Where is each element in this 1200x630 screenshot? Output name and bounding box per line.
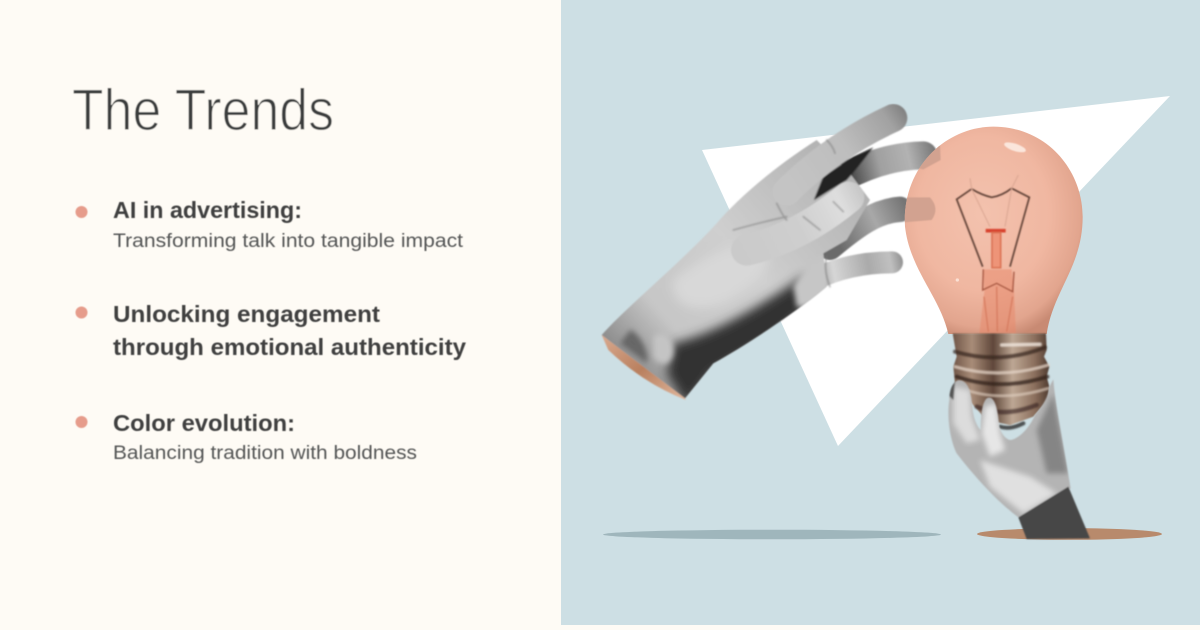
highlight — [1003, 140, 1027, 154]
bullet — [76, 306, 88, 318]
description: Balancing tradition with boldness — [113, 443, 417, 464]
knuckle shading — [733, 140, 843, 287]
heading second line: through emotional authenticity — [113, 334, 466, 360]
screw base — [953, 333, 1049, 428]
title: The Trends — [72, 78, 334, 143]
heading: Unlocking engagement — [113, 301, 380, 327]
fingertips seen through glass — [903, 143, 941, 222]
white triangle — [702, 96, 1170, 446]
panel: illustration background — [561, 0, 1200, 625]
filament support wire — [957, 175, 1029, 334]
list item: Unlocking engagement — [76, 301, 466, 360]
heading: Color evolution: — [113, 410, 295, 436]
bullet — [76, 416, 88, 428]
description: Transforming talk into tangible impact — [113, 231, 464, 252]
list item: AI in advertising — [76, 197, 464, 252]
bulb glass — [905, 127, 1083, 334]
shadow ellipse under hand — [603, 530, 941, 539]
hole ellipse under lower hand — [977, 528, 1162, 540]
icon: holding hand — [947, 379, 1090, 539]
bullet — [76, 206, 88, 218]
dark gap between fingers — [814, 147, 873, 200]
heading: AI in advertising: — [113, 197, 302, 223]
icon: reaching hand — [602, 118, 923, 407]
icon: light bulb — [903, 127, 1083, 428]
sleeve — [1018, 487, 1090, 539]
list item: Color evolution — [76, 410, 417, 464]
hand cut surface — [602, 335, 686, 400]
